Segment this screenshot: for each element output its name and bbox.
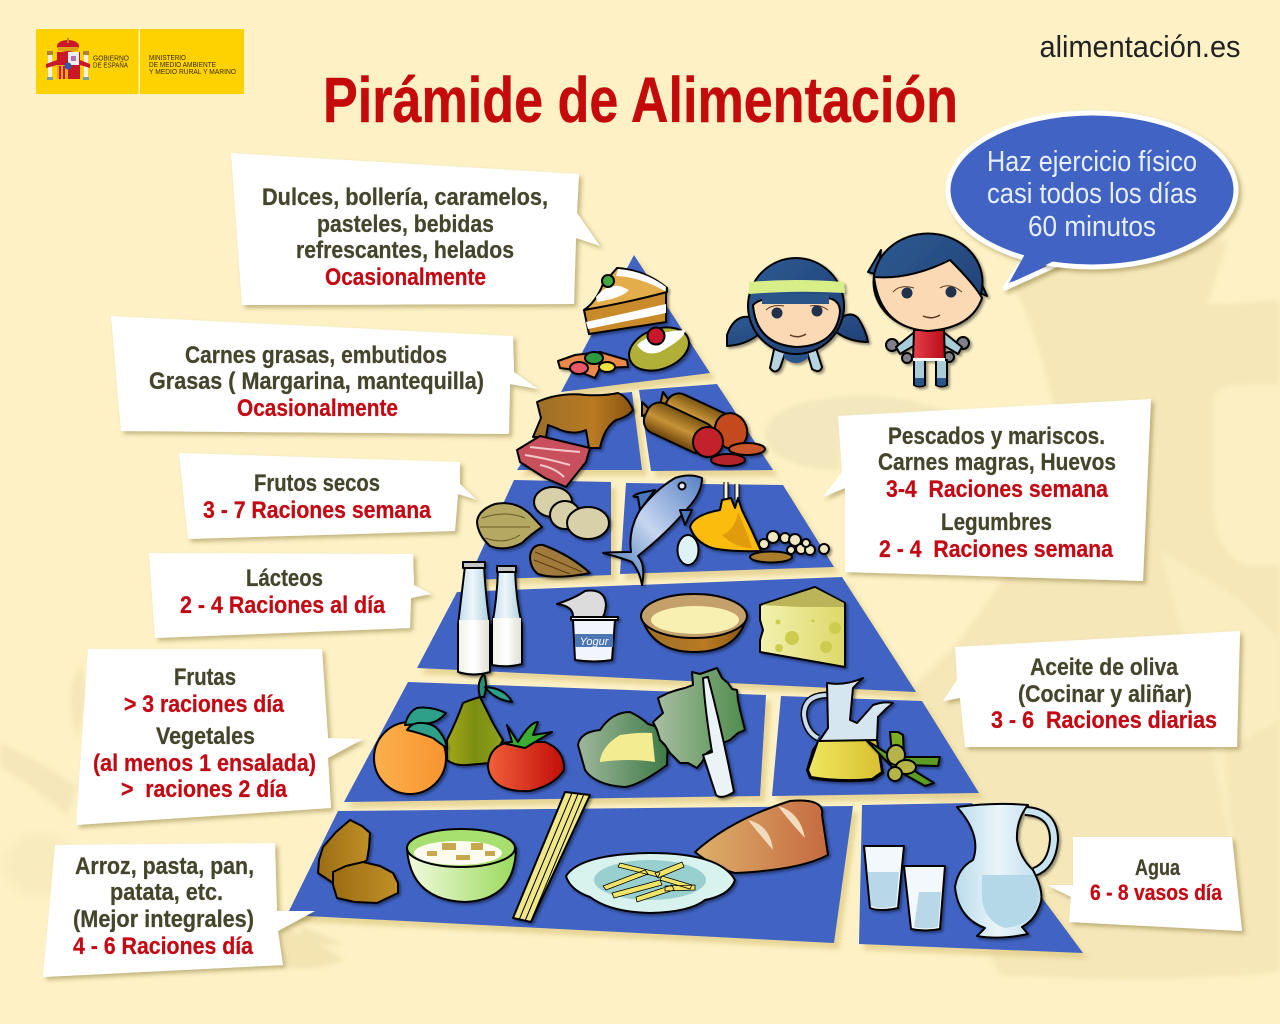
pyramid: food group blocks [287,255,1083,953]
callout: olive oil: (Cocinar y aliñar) [1018,681,1192,708]
callout: fish, lean meats, eggs, legumes: Pescados y mariscos. [888,423,1105,450]
tier: olive oil [772,696,979,796]
pyramid shadow [292,261,1088,959]
boy head [874,234,982,330]
tier: sausages [639,384,773,471]
girl pigtails [727,314,868,346]
callout: nuts [179,453,477,539]
callout: fruit and vegetables: > 3 raciones día [124,691,285,718]
callout: fatty meats [111,316,538,434]
callout: cereals: Arroz, pasta, pan, [75,853,254,880]
characters: boy with dumbbells [868,234,987,386]
callout: olive oil [943,631,1240,747]
callout: sweets: refrescantes, helados [296,237,514,264]
callout: nuts: Frutos secos [254,470,380,497]
callout: cereals: (Mejor integrales) [73,906,254,933]
girl arms [770,342,822,372]
icon: bread [695,801,828,873]
boy arms [896,330,962,354]
boy legs [914,360,947,386]
icon: nuts [477,487,609,577]
boy dumbbells [886,337,969,363]
callout: fruit and vegetables [76,649,363,825]
icon: legumes [750,531,829,562]
callout: dairy: 2 - 4 Raciones al día [180,592,386,619]
callout: fruit and vegetables: (al menos 1 ensalada) [93,750,316,777]
logo: Gobierno de España: GOBIERNO [93,56,130,62]
icon: bull [533,393,633,448]
logo: Gobierno de España: DE ESPAÑA [93,60,128,70]
tier: water [859,803,1083,953]
icon: water glasses [864,846,945,930]
callout: fish, lean meats, eggs, legumes: 2 - 4 Raciones semana [879,536,1114,563]
callout: sweets: Ocasionalmente [325,264,486,291]
tier: sweets [561,255,710,392]
callout: fatty meats: Ocasionalmente [237,395,398,422]
callout: sweets: Dulces, bollería, caramelos, [262,184,548,211]
callout: fish, lean meats, eggs, legumes: Legumbres [941,509,1052,536]
title: Pirámide de Alimentación [323,64,958,136]
icon: olives [866,732,940,786]
callout: fruit and vegetables: > raciones 2 día [121,776,288,803]
icon: spaghetti [513,792,590,922]
icon: chard leaf [653,668,745,797]
tier: nuts [468,480,611,580]
callout: cereals: patata, etc. [110,879,223,906]
icon: water jug [955,804,1054,938]
logo: Gobierno de España: DE MEDIO AMBIENTE [149,62,216,69]
callout: nuts: 3 - 7 Raciones semana [203,497,432,524]
callout: sweets: pasteles, bebidas [317,211,494,238]
callout: dairy: Lácteos [246,565,323,592]
icon: cured sausages [640,389,765,466]
callout: cereals: 4 - 6 Raciones día [73,933,254,960]
tier: fish and eggs [620,483,834,574]
icon: iced bun [623,320,695,378]
speech bubble: physical exercise [948,113,1236,288]
callout: fruit and vegetables: Frutas [174,664,236,691]
icon: egg [678,535,698,565]
tier: fatty meats [517,392,642,470]
characters: girl [727,258,868,372]
icon: cheese [760,587,845,667]
speech bubble: physical exercise: Haz ejercicio físico [987,146,1197,178]
callout: fruit and vegetables: Vegetales [156,723,255,750]
icon: chicken [690,482,761,551]
logo: Gobierno de España: Y MEDIO RURAL Y MARINO [149,69,237,76]
callout: fish, lean meats, eggs, legumes: Carnes magras, Huevos [878,449,1116,476]
callout: water [1047,837,1242,931]
icon: raw meat [517,436,590,487]
icon: yogurt [557,591,618,662]
callout: fatty meats: Grasas ( Margarina, mantequilla) [149,368,484,395]
boy shirt [913,330,945,360]
callout: fish, lean meats, eggs, legumes: 3-4 Raciones semana [886,476,1109,503]
tier: fruit and vegetables [344,682,766,802]
icon: pear [447,674,512,765]
girl head [748,258,844,354]
tier: cereals [287,806,853,943]
callout: cereals [43,843,315,977]
logo: Gobierno de España: MINISTERIO [149,55,186,62]
icon: candies [558,352,628,378]
speech bubble: physical exercise: 60 minutos [1028,211,1156,243]
icon: tomato [488,722,564,791]
speech bubble: physical exercise: casi todos los días [987,178,1197,210]
callout: fish, lean meats, eggs, legumes [823,399,1151,581]
callout: dairy [149,553,431,638]
site name: alimentación.es: alimentación.es [1040,29,1240,64]
icon: orange [374,708,447,794]
icon: plate of pasta [566,853,735,913]
icon: custard dish [641,594,747,652]
icon: cauliflower [578,712,668,787]
callout: water: Agua [1135,855,1181,880]
callout: olive oil: Aceite de oliva [1030,654,1179,681]
callout: water: 6 - 8 vasos día [1090,880,1223,905]
logo: Gobierno de España [36,29,244,94]
boy hair tufts [868,250,987,296]
callout: sweets [231,153,600,305]
callout: fatty meats: Carnes grasas, embutidos [185,342,447,369]
icon: soup bowl [407,829,516,902]
callout: olive oil: 3 - 6 Raciones diarias [991,707,1217,734]
icon: milk bottles [458,562,522,674]
tier: dairy [417,577,916,692]
icon: cake slice [584,268,667,334]
icon: fish [603,476,702,585]
icon: potatoes [318,820,398,903]
icon: yogurt: Yogur [580,636,610,648]
icon: oil cruet [804,678,893,781]
